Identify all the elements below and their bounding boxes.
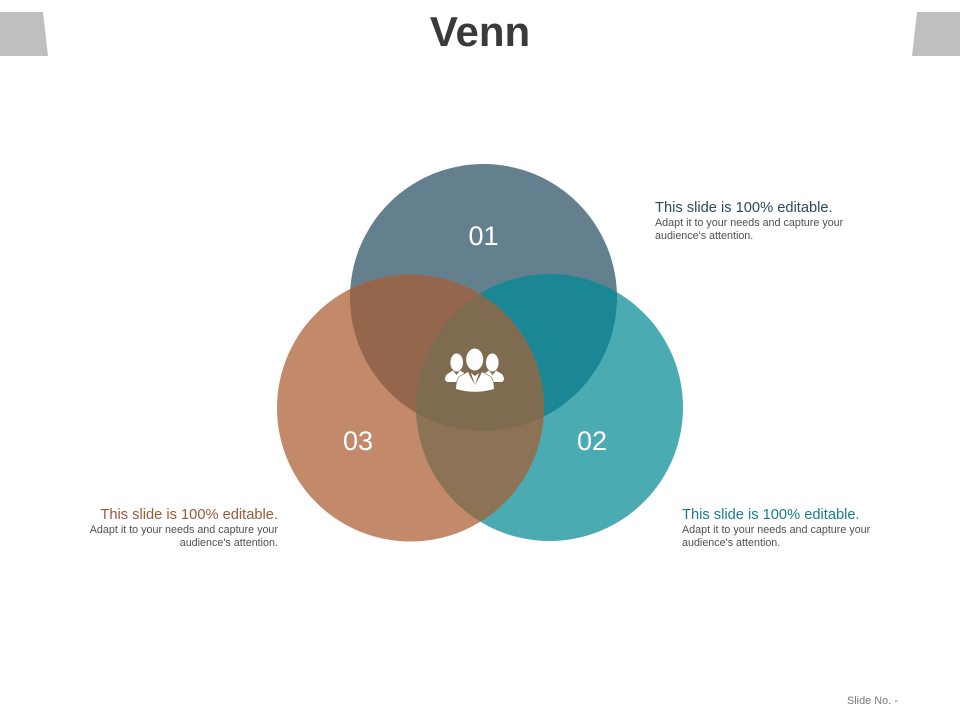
heading 01: This slide is 100% editable. <box>655 200 833 216</box>
left person <box>445 354 464 382</box>
description 01: Adapt it to your needs and capture your <box>655 217 843 229</box>
title: Venn <box>430 8 530 55</box>
venn diagram <box>277 164 683 542</box>
overlap: 01 and 03 <box>350 274 480 412</box>
description 01 <box>655 217 844 242</box>
description 02 <box>682 524 870 549</box>
description 03: Adapt it to your needs and capture your <box>90 524 278 536</box>
overlap: 02 and 03 <box>416 294 544 522</box>
overlap: centre <box>416 294 544 431</box>
description 03 <box>90 524 278 549</box>
corner tab: top right <box>912 12 960 56</box>
heading 02: This slide is 100% editable. <box>682 507 860 523</box>
slide number: Slide No. - <box>847 695 898 707</box>
icon: group of people <box>445 348 504 392</box>
text block: 03 <box>90 507 278 549</box>
description 03: audience's attention. <box>180 537 278 549</box>
description 02: Adapt it to your needs and capture your <box>682 524 870 536</box>
centre person body <box>456 372 494 392</box>
number 01: 01 <box>468 221 499 251</box>
right person <box>485 354 504 382</box>
heading 03: This slide is 100% editable. <box>100 507 278 523</box>
text block: 02 <box>682 507 870 549</box>
description 01: audience's attention. <box>655 230 753 242</box>
number 02: 02 <box>577 426 607 456</box>
circle 01 <box>350 164 617 431</box>
circle 03 <box>277 274 544 542</box>
overlap: 01 and 02 <box>416 274 617 417</box>
centre person collar <box>471 373 479 385</box>
text block: 01 <box>655 200 844 242</box>
description 02: audience's attention. <box>682 537 780 549</box>
number 03: 03 <box>343 426 373 456</box>
corner tab: top left <box>0 12 48 56</box>
circle 02 <box>416 274 683 541</box>
centre person head <box>466 348 483 370</box>
